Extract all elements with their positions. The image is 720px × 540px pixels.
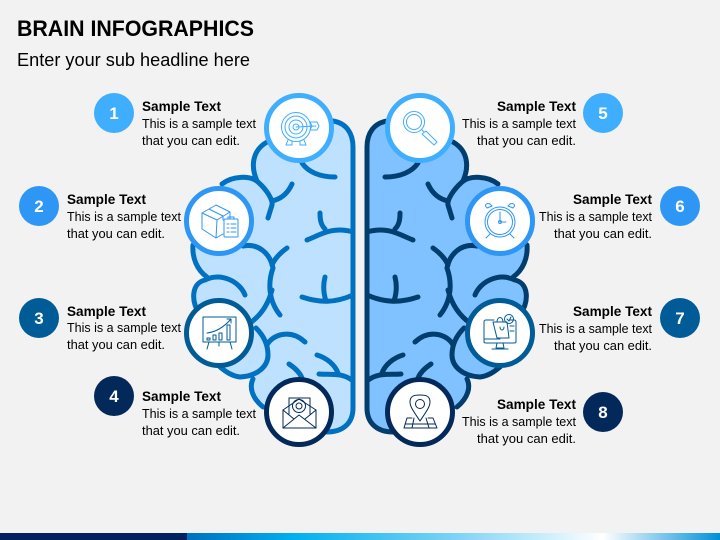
icon: online shopping monitor xyxy=(468,300,532,366)
item 4 xyxy=(94,376,256,438)
item 3 xyxy=(19,298,181,352)
item 7: 7 xyxy=(675,309,685,328)
item 4: This is a sample text xyxy=(142,406,256,421)
item 2: that you can edit. xyxy=(67,226,165,241)
subtitle: Enter your sub headline here xyxy=(17,50,250,70)
item 8: This is a sample text xyxy=(462,414,576,429)
item 1: Sample Text xyxy=(142,98,221,114)
item 7 xyxy=(539,298,700,353)
item 6: 6 xyxy=(675,197,685,216)
footer gradient bar xyxy=(0,533,720,540)
item 1: This is a sample text xyxy=(142,116,256,131)
item 4: that you can edit. xyxy=(142,423,240,438)
item 6: Sample Text xyxy=(573,191,652,207)
item 3: Sample Text xyxy=(67,303,146,319)
left brain hemisphere xyxy=(193,120,353,432)
right brain hemisphere xyxy=(367,120,527,432)
item 5: This is a sample text xyxy=(462,116,576,131)
item 8: 8 xyxy=(598,403,608,422)
item 3: This is a sample text xyxy=(67,320,181,335)
item 2: 2 xyxy=(34,197,44,216)
item 7: This is a sample text xyxy=(539,321,652,336)
icon: map pin xyxy=(388,380,452,444)
icon: presentation chart xyxy=(186,300,252,366)
item 7: Sample Text xyxy=(573,303,652,319)
item 3: 3 xyxy=(34,309,44,328)
item 6 xyxy=(539,186,700,241)
item 1: that you can edit. xyxy=(142,133,240,148)
item 1: 1 xyxy=(109,104,119,123)
icon: magnifying glass xyxy=(388,96,452,160)
icon: target xyxy=(266,96,332,160)
item 6: that you can edit. xyxy=(554,226,652,241)
item 7: that you can edit. xyxy=(554,338,652,353)
icon: box and checklist xyxy=(186,188,252,254)
item 4: 4 xyxy=(109,387,119,406)
item 6: This is a sample text xyxy=(539,209,652,224)
item 5 xyxy=(462,93,623,148)
item 4: Sample Text xyxy=(142,388,221,404)
icon: email envelope xyxy=(266,380,332,444)
title: BRAIN INFOGRAPHICS xyxy=(17,16,254,41)
item 2: Sample Text xyxy=(67,191,146,207)
item 1 xyxy=(94,93,256,148)
item 3: that you can edit. xyxy=(67,337,165,352)
item 5: that you can edit. xyxy=(477,133,576,148)
item 8 xyxy=(462,392,623,446)
item 2: This is a sample text xyxy=(67,209,181,224)
item 8: Sample Text xyxy=(497,396,576,412)
icon: alarm clock xyxy=(468,188,532,254)
item 8: that you can edit. xyxy=(477,431,576,446)
item 2 xyxy=(19,186,181,241)
item 5: 5 xyxy=(598,104,608,123)
item 5: Sample Text xyxy=(497,98,576,114)
